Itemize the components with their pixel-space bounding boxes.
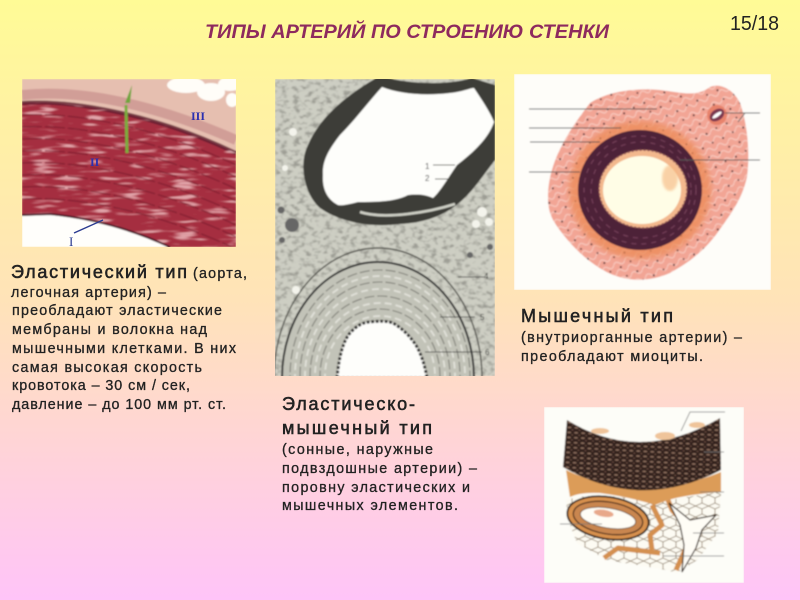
small satellite vessel <box>707 105 727 125</box>
muscular ring <box>578 130 702 250</box>
label I with pointer <box>69 220 103 249</box>
upper vessel dark wall <box>303 76 495 225</box>
panel: elastic artery micrograph <box>22 77 242 249</box>
label II: II <box>90 155 100 169</box>
pointer lines <box>529 109 760 172</box>
orange strands <box>604 500 686 570</box>
panel: muscular artery section with fat tissue <box>544 407 744 583</box>
upper vessel labels: 1 <box>425 162 430 171</box>
connective tissue texture <box>275 79 495 376</box>
small vessel <box>564 491 652 545</box>
upper vessel lumen <box>323 87 494 205</box>
lower vessel labels: 6 <box>485 348 490 357</box>
orange halo <box>569 121 711 259</box>
text: elastic-muscular type <box>282 394 477 514</box>
text: elastic type: мышечными клетками. В них <box>12 341 236 357</box>
text: elastic type: давление – до 100 мм рт. ст. <box>12 397 226 413</box>
lower fat tissue <box>566 492 722 572</box>
text: elastic-muscular type: поровну эластических и <box>282 480 470 496</box>
pale fat spots <box>282 128 493 294</box>
panel: elastic-muscular artery micrograph <box>275 79 495 376</box>
green arrow <box>125 85 132 153</box>
panel: muscular artery micrograph <box>514 74 771 290</box>
lumen <box>22 214 170 247</box>
lumen <box>603 156 681 224</box>
text: elastic-muscular type: мышечный тип <box>282 418 432 438</box>
pale strip in wall <box>360 204 455 215</box>
dark upper border of middle layer <box>22 103 236 153</box>
lower vessel labels: 4 <box>484 272 489 281</box>
text: elastic type: самая высокая скорость <box>12 360 202 376</box>
text: muscular type: Мышечный тип <box>521 306 673 326</box>
label I with pointer: I <box>69 234 73 249</box>
small peach pads <box>591 422 705 440</box>
text: elastic type: мембраны и волокна над <box>12 322 208 338</box>
ring fibres <box>584 136 696 244</box>
text: elastic-muscular type: мышечных элементов. <box>282 498 458 514</box>
lower vessel labels <box>425 272 490 357</box>
text: elastic type: преобладают эластические <box>12 303 222 319</box>
fat cells <box>167 77 242 107</box>
text: muscular type: преобладают миоциты. <box>521 349 703 365</box>
text: elastic type: Эластический тип <box>11 262 187 282</box>
text: elastic type: (аорта, <box>193 266 247 282</box>
lower vessel <box>275 246 484 376</box>
dark muscular band <box>563 418 721 490</box>
text: elastic-muscular type: подвздошные артерии) – <box>282 461 477 477</box>
lumen edge <box>22 214 170 247</box>
text: elastic-muscular type: Эластическо- <box>282 394 415 414</box>
blood remnants <box>662 165 678 191</box>
white cleft <box>669 503 716 572</box>
tissue texture <box>540 80 755 285</box>
text: muscular type: (внутриорганные артерии) – <box>521 330 742 346</box>
lower vessel labels: 5 <box>480 313 485 322</box>
outer wall speckle <box>22 94 236 140</box>
text: elastic-muscular type: (сонные, наружные <box>282 442 433 458</box>
upper vessel labels: 2 <box>425 174 430 183</box>
wavy elastic fibres <box>22 104 236 247</box>
lower vessel lumen <box>337 321 427 378</box>
label III: III <box>191 109 205 123</box>
title: ТИПЫ АРТЕРИЙ ПО СТРОЕНИЮ СТЕНКИ <box>205 21 609 43</box>
pointer lines <box>560 412 725 556</box>
small vessels at left <box>278 206 493 258</box>
lumen edge <box>599 150 687 228</box>
upper vessel labels <box>425 162 455 183</box>
orange connective band <box>566 470 721 505</box>
text: elastic type: кровотока – 30 см / сек, <box>12 378 190 394</box>
text: elastic type <box>11 262 247 413</box>
text: elastic type: легочная артерия) – <box>11 285 166 301</box>
slide number: 15/18 <box>730 13 779 35</box>
text: muscular type <box>521 306 742 365</box>
middle wall layer <box>22 103 236 247</box>
